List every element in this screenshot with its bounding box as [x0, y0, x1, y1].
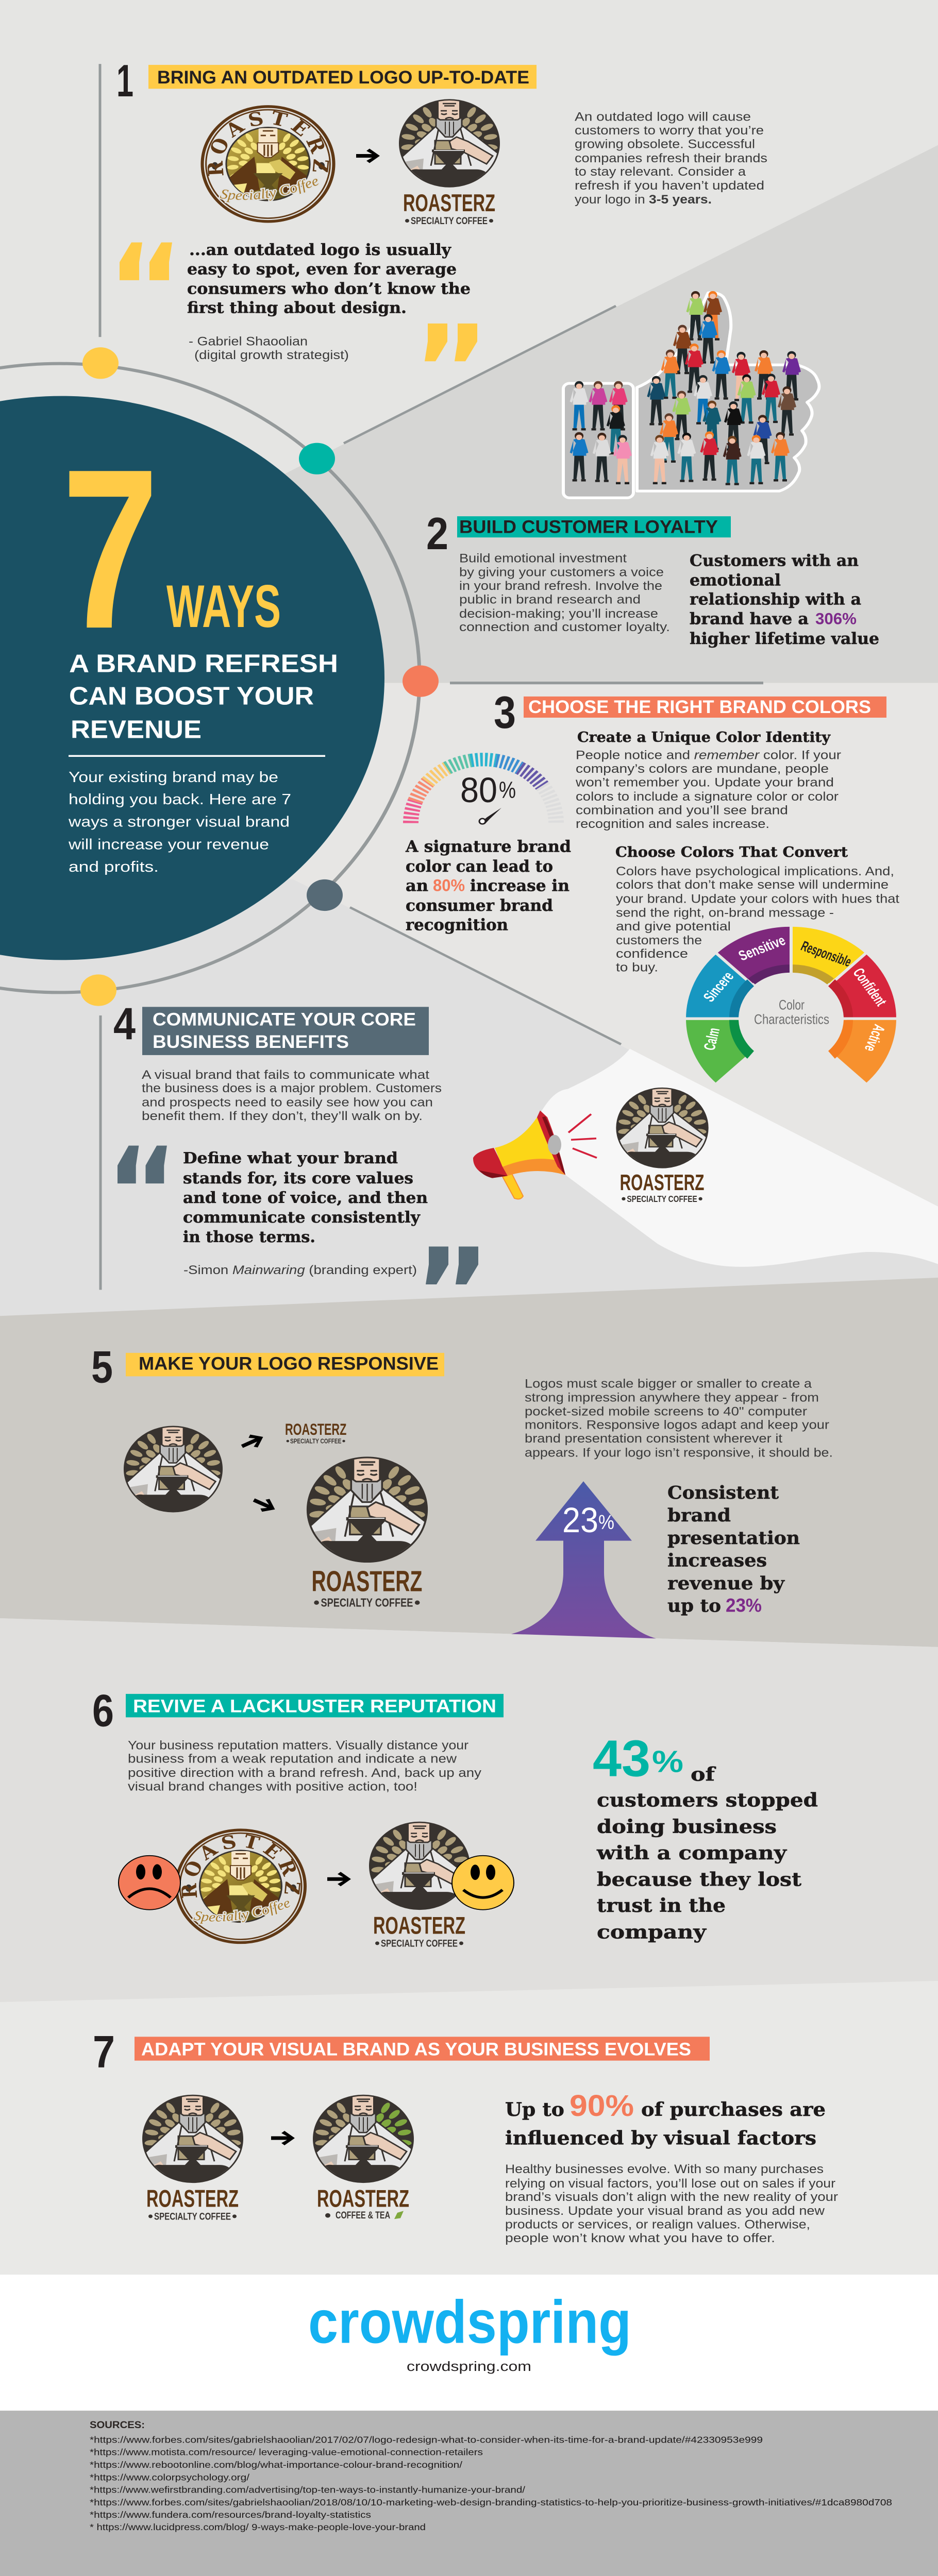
old logo — [176, 1828, 307, 1944]
heading 1: BRING AN OUTDATED LOGO UP-TO-DATE — [157, 67, 529, 87]
panel: section 5 responsive logo — [91, 1342, 833, 1638]
body text 4: and prospects need to easily see how you can — [142, 1096, 433, 1109]
subheading: unique color identity: Create a Unique Color Identity — [577, 729, 831, 745]
number 7: 7 — [93, 2027, 115, 2078]
opening quote mark — [120, 242, 172, 280]
growth arrow 23 percent: 23 — [562, 1501, 598, 1540]
stat 6: because they lost — [597, 1869, 802, 1891]
new logo — [369, 1822, 470, 1949]
body text 3a: People notice and remember color. If your — [576, 749, 842, 762]
body text 3a: colors to include a signature color or color — [576, 790, 839, 803]
stat 2: relationship with a — [690, 590, 861, 608]
panel: section 4 communicate benefits — [113, 998, 709, 1284]
body text 4 — [142, 1068, 442, 1123]
quote text 4 — [183, 1149, 428, 1246]
headline: CAN BOOST YOUR — [69, 682, 314, 710]
body text 3a: combination and you’ll see brand — [576, 804, 788, 817]
wheel center label: Color — [779, 997, 805, 1013]
hero intro text: will increase your revenue — [68, 836, 269, 853]
sources list: *https://www.motista.com/resource/ leveraging-value-emotional-connection-retailers — [90, 2447, 483, 2457]
stat 5 — [667, 1482, 800, 1616]
arrow down-right — [250, 1494, 279, 1516]
heading 4: BUSINESS BENEFITS — [153, 1031, 349, 1052]
body text 5: Logos must scale bigger or smaller to create a — [525, 1377, 812, 1391]
new logo in beam: ROASTERZ — [620, 1170, 704, 1195]
body text 3b: colors that don’t make sense will undermine — [616, 878, 889, 892]
body text 3a: won’t remember you. Update your brand — [575, 776, 834, 789]
body text 1: to stay relevant. Consider a — [575, 165, 746, 179]
body text 7: brand’s visuals don’t align with the new reality of your — [505, 2191, 839, 2204]
quote text 1 — [187, 241, 471, 317]
stat 6: company — [597, 1921, 707, 1943]
small wordmark — [285, 1420, 346, 1445]
hero intro text — [68, 769, 291, 875]
opening quote mark — [118, 1146, 167, 1183]
body text 2: public in brand research and — [459, 593, 641, 606]
body text 1: companies refresh their brands — [575, 151, 767, 165]
quote text 4: and tone of voice, and then — [183, 1189, 428, 1207]
stat 5: up to — [667, 1595, 721, 1616]
stat 7: of purchases are — [641, 2098, 826, 2121]
number 5: 5 — [91, 1342, 113, 1393]
body text 2: decision-making; you’ll increase — [459, 607, 658, 620]
new logo in beam: SPECIALTY COFFEE — [627, 1194, 697, 1205]
color characteristics wheel: Calm — [701, 1026, 724, 1052]
color characteristics wheel: Active — [861, 1022, 888, 1054]
number 1: 1 — [116, 56, 133, 107]
sources list: *https://www.forbes.com/sites/gabrielshaoolian/2018/08/10/10-marketing-web-design-branding-statistics-to-help-you-prioritize-business-growth-initiatives/#1dca8980d708 — [90, 2497, 892, 2507]
quote text 4: stands for, its core values — [183, 1169, 413, 1188]
crowdspring wordmark: crowdspring — [308, 2287, 631, 2356]
subheading: colors that convert: Choose Colors That Convert — [615, 844, 848, 860]
panel: crowdspring logo — [308, 2287, 631, 2374]
body text 3b — [616, 865, 899, 974]
headline — [69, 650, 338, 743]
stat 2: Customers with an — [690, 551, 859, 570]
sources list — [90, 2435, 892, 2532]
body text 7 — [505, 2163, 839, 2245]
number 4: 4 — [113, 998, 136, 1049]
body text 6: visual brand changes with positive action, too! — [128, 1780, 417, 1793]
body text 7: Healthy businesses evolve. With so many purchases — [505, 2163, 824, 2176]
panel: hero title — [62, 422, 338, 875]
stat 6: 43 — [593, 1729, 650, 1787]
body text 3b: your brand. Update your colors with hues that — [616, 892, 899, 906]
stat 3: color can lead to — [406, 857, 553, 875]
stat 6: trust in the — [597, 1895, 726, 1917]
heading 4 — [142, 1007, 429, 1055]
quote text 4: Define what your brand — [183, 1149, 398, 1167]
stat 5: brand — [667, 1504, 731, 1526]
color characteristics wheel: Responsible — [798, 939, 854, 970]
panel: section 7 evolve — [93, 2027, 839, 2245]
panel: sources — [90, 2419, 892, 2532]
body text 6: business from a weak reputation and indicate a new — [128, 1752, 457, 1766]
headline: A BRAND REFRESH — [69, 650, 338, 678]
hero rule — [69, 755, 325, 757]
body text 3b: and give potential — [616, 920, 731, 934]
quote text 1: easy to spot, even for average — [187, 260, 457, 278]
body text 1: refresh if you haven’t updated — [575, 179, 764, 193]
old logo: Specialty Coffee — [219, 178, 319, 203]
body text 5: brand presentation consistent wherever it — [525, 1432, 782, 1446]
body text 4: benefit them. If they don’t, they’ll walk on by. — [142, 1109, 423, 1123]
stat 6: with a company — [596, 1842, 787, 1865]
big numeral 7: 7 — [62, 422, 159, 676]
new logo — [399, 99, 500, 227]
logo before: ROASTERZ — [146, 2185, 239, 2212]
closing quote mark — [425, 324, 477, 361]
growth arrow 23 percent — [511, 1481, 656, 1638]
background: diagonal grey panel behind section 2 — [258, 145, 938, 683]
heading 5: MAKE YOUR LOGO RESPONSIVE — [139, 1353, 439, 1374]
sources list: *https://www.colorpsychology.org/ — [90, 2472, 250, 2482]
logo after: COFFEE & TEA — [336, 2210, 390, 2221]
background: section 6 panel — [0, 1618, 938, 2002]
old logo — [200, 105, 336, 223]
stat 2: brand have a — [690, 609, 809, 628]
timeline connector lines — [100, 64, 763, 1290]
quote text 1: first thing about design. — [187, 299, 407, 317]
panel: section 6 reputation — [92, 1685, 818, 1949]
quote text 4: in those terms. — [183, 1228, 315, 1246]
body text 4: the business does is a major problem. Customers — [142, 1082, 442, 1095]
body text 3a: company’s colors are mundane, people — [576, 762, 829, 776]
body text 5: pocket-sized mobile screens to 40" computer — [525, 1405, 808, 1418]
panel: section 2 customer loyalty — [426, 291, 879, 648]
sources list: * https://www.lucidpress.com/blog/ 9-ways-make-people-love-your-brand — [90, 2522, 426, 2532]
new logo: ROASTERZ — [403, 189, 495, 216]
stat 3 — [405, 837, 571, 934]
stat 2: emotional — [690, 570, 781, 589]
color characteristics wheel: Confident — [849, 965, 890, 1009]
stat 6: doing business — [597, 1816, 777, 1838]
stat 2: higher lifetime value — [690, 629, 879, 648]
stat 5: revenue by — [667, 1572, 785, 1594]
logo after — [313, 2095, 414, 2221]
stat 7: Up to — [505, 2098, 564, 2121]
stat 6 — [593, 1729, 818, 1943]
hero intro text: and profits. — [69, 858, 159, 875]
icon: thumbs-up crowd — [563, 291, 819, 498]
heading 4: COMMUNICATE YOUR CORE — [153, 1009, 416, 1029]
stat 3: consumer brand — [406, 896, 553, 915]
body text 1: customers to worry that you’re — [575, 124, 764, 138]
timeline ring — [0, 364, 420, 992]
panel: section 3 brand colors — [405, 687, 899, 1084]
hero intro text: Your existing brand may be — [69, 769, 278, 786]
arrow up-right — [238, 1431, 267, 1453]
arrow — [327, 1872, 351, 1886]
large logo: SPECIALTY COFFEE — [321, 1597, 413, 1609]
quote attribution 1: - Gabriel Shaoolian — [189, 335, 308, 348]
heading 2: BUILD CUSTOMER LOYALTY — [459, 517, 718, 537]
body text 3b: confidence — [616, 947, 688, 961]
hero intro text: ways a stronger visual brand — [68, 814, 290, 830]
gauge 80 percent: 80 — [460, 770, 497, 810]
stat 6: customers stopped — [597, 1789, 818, 1811]
stat 6: % — [652, 1744, 683, 1779]
gauge 80 percent — [411, 759, 556, 824]
number 6: 6 — [92, 1685, 114, 1736]
stat 3: increase in — [470, 876, 569, 895]
stat 7: influenced by visual factors — [505, 2127, 816, 2149]
closing quote mark — [426, 1247, 478, 1284]
old logo: ROASTERZ — [207, 110, 329, 176]
stat 3: an — [406, 876, 428, 895]
heading 7: ADAPT YOUR VISUAL BRAND AS YOUR BUSINESS EVOLVES — [141, 2039, 691, 2059]
crowdspring url: crowdspring.com — [407, 2359, 531, 2374]
stat 2 — [690, 551, 879, 648]
stat 7: 90% — [569, 2089, 634, 2123]
wheel center label: Characteristics — [754, 1012, 829, 1027]
headline: REVENUE — [71, 716, 202, 743]
body text 3b: customers the — [616, 934, 702, 947]
body text 3b: to buy. — [616, 961, 658, 974]
icon: sad face — [119, 1856, 180, 1910]
number 2: 2 — [426, 509, 448, 559]
body text 4: A visual brand that fails to communicate what — [142, 1068, 429, 1081]
new logo: ROASTERZ — [373, 1912, 465, 1939]
body text 7: products or services, or realign values. Otherwise, — [505, 2218, 810, 2231]
body text 2: Build emotional investment — [459, 552, 627, 565]
new logo: SPECIALTY COFFEE — [411, 215, 488, 227]
body text 3b: send the right, on-brand message - — [616, 906, 834, 920]
sources heading: SOURCES: — [90, 2419, 145, 2431]
icon: megaphone — [473, 1110, 597, 1199]
arrow — [271, 2131, 295, 2145]
gauge 80 percent: % — [499, 777, 516, 803]
small wordmark: ROASTERZ — [285, 1420, 346, 1438]
stat 3: A signature brand — [405, 837, 571, 856]
stat 3: 80% — [433, 877, 465, 895]
old logo: Specialty Coffee — [192, 1900, 290, 1925]
body text 5: strong impression anywhere they appear - from — [525, 1391, 819, 1404]
small wordmark: SPECIALTY COFFEE — [290, 1437, 341, 1445]
logo mark — [124, 1426, 223, 1513]
gauge needle — [479, 808, 501, 824]
sources list: *https://www.forbes.com/sites/gabrielshaoolian/2017/02/07/logo-redesign-what-to-consider-when-its-time-for-a-brand-update/#42330953e999 — [90, 2435, 763, 2445]
background: section 7 panel — [0, 1981, 938, 2275]
sources list: *https://www.rebootonline.com/blog/what-importance-colour-brand-recognition/ — [90, 2460, 463, 2470]
sources list: *https://www.wefirstbranding.com/advertising/top-ten-ways-to-instantly-humanize-your-brand/ — [90, 2485, 526, 2495]
large logo: ROASTERZ — [311, 1565, 422, 1598]
stat 3: recognition — [406, 915, 508, 934]
logo after: ROASTERZ — [317, 2185, 409, 2212]
quote attribution 4: -Simon Mainwaring (branding expert) — [183, 1263, 417, 1277]
body text 2: by giving your customers a voice — [459, 566, 664, 579]
quote text 1: consumers who don’t know the — [187, 280, 471, 298]
body text 7: people won’t know what you have to offer. — [505, 2232, 775, 2245]
body text 2: in your brand refresh. Involve the — [459, 580, 662, 593]
quote attribution 1 — [189, 335, 349, 362]
quote attribution 1: (digital growth strategist) — [194, 348, 349, 362]
body text 6 — [128, 1739, 481, 1793]
background: sources panel — [0, 2411, 938, 2576]
logo before — [142, 2095, 243, 2222]
body text 5 — [525, 1377, 833, 1460]
stat 6: of — [691, 1764, 716, 1786]
body text 3a: recognition and sales increase. — [576, 818, 769, 831]
logo before: SPECIALTY COFFEE — [154, 2211, 231, 2222]
sources list: *https://www.fundera.com/resources/brand-loyalty-statistics — [90, 2510, 371, 2520]
heading 6: REVIVE A LACKLUSTER REPUTATION — [133, 1696, 496, 1716]
body text 2 — [459, 552, 670, 634]
color characteristics wheel: Sincere — [700, 969, 738, 1005]
background: upper light panel — [0, 0, 938, 683]
body text 6: positive direction with a brand refresh. And, back up any — [128, 1767, 481, 1780]
quote text 4: communicate consistently — [183, 1208, 421, 1226]
body text 1: your logo in 3-5 years. — [575, 193, 712, 206]
body text 2: connection and customer loyalty. — [459, 621, 670, 634]
background: section 3 panel — [0, 683, 938, 1316]
color characteristics wheel: Sensitive — [736, 933, 788, 964]
icon: happy face — [452, 1856, 514, 1910]
body text 1: An outdated logo will cause — [575, 110, 751, 124]
body text 3b: Colors have psychological implications. And, — [616, 865, 894, 878]
body text 3a — [575, 749, 842, 831]
background: megaphone light beam — [541, 1049, 938, 1267]
arrow — [356, 149, 380, 163]
stat 5: presentation — [667, 1528, 800, 1548]
body text 1: growing obsolete. Successful — [575, 138, 755, 151]
new logo in beam — [616, 1088, 709, 1205]
body text 1 — [575, 110, 767, 206]
body text 5: monitors. Responsive logos adapt and keep your — [525, 1418, 830, 1432]
word WAYS: WAYS — [166, 572, 281, 640]
hero intro text: holding you back. Here are 7 — [69, 791, 291, 807]
large logo — [307, 1456, 428, 1609]
background: section 4 panel — [0, 879, 938, 1316]
body text 7: relying on visual factors, you’ll lose out on sales if your — [505, 2177, 836, 2190]
timeline dots — [80, 347, 439, 1006]
body text 5: appears. If your logo isn’t responsive, it should be. — [525, 1446, 833, 1460]
number 3: 3 — [494, 687, 516, 738]
quote text 1: ...an outdated logo is usually — [189, 241, 451, 259]
heading 3: CHOOSE THE RIGHT BRAND COLORS — [528, 697, 871, 717]
stat 7 — [505, 2089, 826, 2149]
stat 5: 23% — [726, 1595, 762, 1616]
old logo: ROASTERZ — [181, 1834, 301, 1898]
stat 5: Consistent — [667, 1482, 779, 1503]
hero circle — [0, 396, 384, 960]
new logo: SPECIALTY COFFEE — [381, 1938, 458, 1949]
panel: section 1 outdated logo — [116, 56, 767, 362]
growth arrow 23 percent: % — [598, 1511, 614, 1533]
stat 2: 306% — [815, 610, 857, 628]
background: section 5 panel — [0, 1278, 938, 1647]
stat 5: increases — [667, 1550, 767, 1571]
body text 6: Your business reputation matters. Visually distance your — [128, 1739, 469, 1752]
background: logo footer panel — [0, 2275, 938, 2411]
wheel center label — [754, 997, 829, 1027]
body text 7: business. Update your visual brand as you add new — [505, 2205, 825, 2218]
color characteristics wheel — [684, 925, 898, 1084]
